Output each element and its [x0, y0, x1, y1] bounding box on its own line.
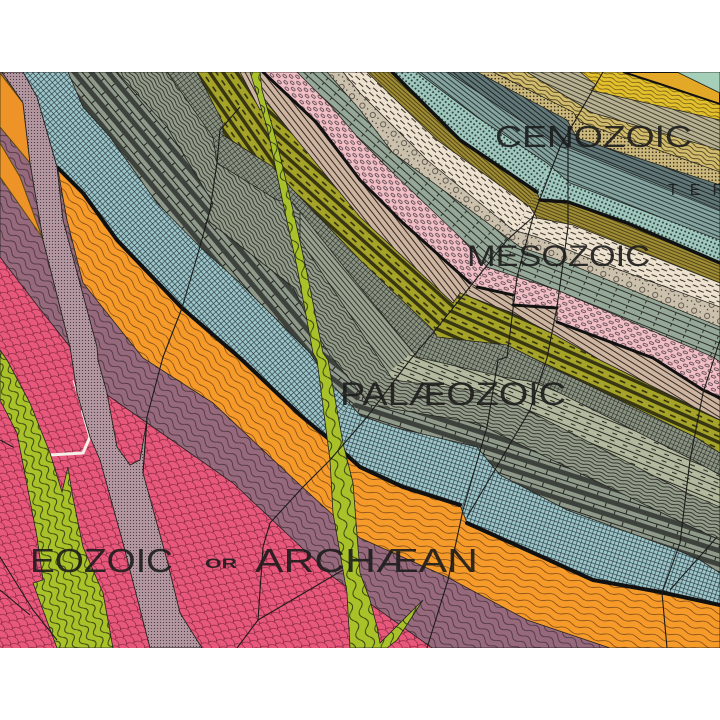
unconformity: thick black lines — [58, 72, 720, 605]
stratum: blue crosshatch limestone — [23, 72, 720, 605]
fault lines — [0, 72, 720, 648]
stratum: dark olive band — [367, 72, 720, 283]
green intrusion, lower left — [0, 350, 113, 648]
stratum: Eozoic maroon gneiss — [0, 72, 720, 648]
stratum: olive dashed band — [197, 72, 720, 453]
stratum: gold upper band — [623, 72, 720, 104]
label: ARCHÆAN: ARCHÆAN — [255, 542, 478, 579]
stratum: tan striped band — [240, 72, 720, 420]
white quartz vein — [50, 380, 90, 455]
stratum: dotted cream conglomerate — [327, 72, 720, 327]
label: OR: OR — [205, 555, 237, 571]
stratum: wavy grey shale — [117, 72, 720, 540]
stratum: blue dotted band — [392, 72, 720, 263]
stratum: tan wavy band — [493, 72, 720, 172]
label: MESOZOIC: MESOZOIC — [467, 240, 650, 273]
stratum: teal striped band — [417, 72, 720, 240]
stratum: grey brick limestone — [68, 72, 720, 573]
stratum: dark grey net pattern — [167, 72, 720, 475]
orange wedges at left edge — [0, 73, 42, 237]
stratum: Eozoic pink base — [0, 72, 720, 648]
stratum: pale dashed sandstone — [300, 212, 720, 507]
label: EOZOIC: EOZOIC — [30, 542, 173, 579]
dotted igneous dyke — [2, 72, 202, 648]
stratum: grey-green brick band — [297, 72, 720, 362]
label: CENOZOIC: CENOZOIC — [495, 119, 692, 154]
geological cross-section illustration — [0, 72, 720, 648]
stratum: light pink oval pattern — [263, 72, 720, 398]
stratum: grey tan striped band — [527, 72, 720, 150]
stratum: yellow cenozoic band — [580, 72, 720, 120]
stratum: dotted tan band — [477, 72, 720, 185]
stratum: dark teal striped band — [448, 72, 720, 210]
green intrusion, centre — [250, 72, 423, 648]
stratum: pale teal corner — [677, 72, 720, 93]
stratum: orange band — [58, 170, 720, 648]
stratum: cream dashed band — [343, 72, 720, 307]
label: PALÆOZOIC: PALÆOZOIC — [340, 376, 566, 412]
